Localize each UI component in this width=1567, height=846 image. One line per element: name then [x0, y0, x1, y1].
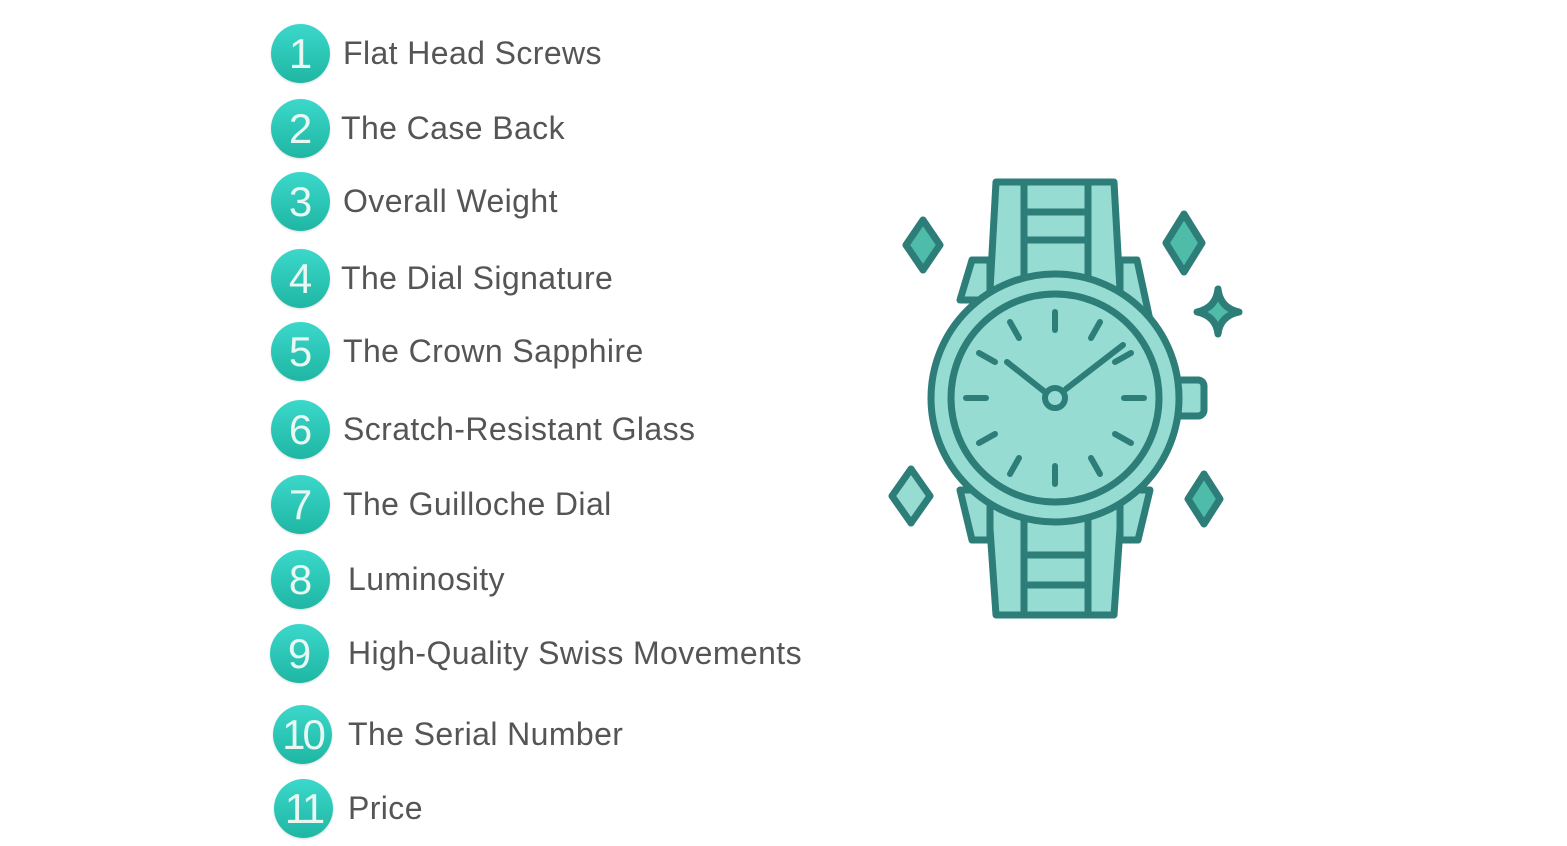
item 4: The Dial Signature [341, 260, 613, 296]
crown [1172, 380, 1204, 416]
item 8: Luminosity [348, 561, 505, 597]
item 3 [270, 172, 558, 233]
item 10 [272, 705, 623, 766]
item 2 [270, 99, 565, 160]
sparkles [892, 214, 1239, 524]
item 1: 1 [289, 30, 312, 77]
item 9: 9 [288, 630, 311, 677]
item 9: High-Quality Swiss Movements [348, 635, 802, 671]
top strap [990, 182, 1120, 290]
item 7: 7 [289, 481, 312, 528]
item 10: The Serial Number [348, 716, 623, 752]
item 10: 10 [282, 711, 323, 758]
item 1 [270, 24, 602, 85]
item 6: 6 [289, 406, 312, 453]
item 6 [270, 400, 695, 461]
case and dial [931, 274, 1179, 522]
item 3: 3 [289, 178, 312, 225]
item 7: The Guilloche Dial [343, 486, 612, 522]
item 7 [270, 475, 612, 536]
item 6: Scratch-Resistant Glass [343, 411, 695, 447]
item 9 [269, 624, 802, 685]
item 2: The Case Back [341, 110, 565, 146]
item 11: 11 [285, 785, 322, 832]
item 5: The Crown Sapphire [343, 333, 644, 369]
item 11: Price [348, 790, 423, 826]
item 5: 5 [289, 328, 312, 375]
item 3: Overall Weight [343, 183, 558, 219]
item 2: 2 [289, 105, 312, 152]
item 1: Flat Head Screws [343, 35, 602, 71]
item 11 [273, 779, 423, 840]
hour markers and hands [966, 312, 1144, 484]
item 8 [270, 550, 505, 611]
item 8: 8 [289, 556, 312, 603]
lugs [960, 260, 1150, 540]
item 5 [270, 322, 644, 383]
item 4 [270, 249, 613, 310]
bottom strap [988, 500, 1122, 615]
list of items [269, 24, 802, 840]
item 4: 4 [289, 255, 312, 302]
